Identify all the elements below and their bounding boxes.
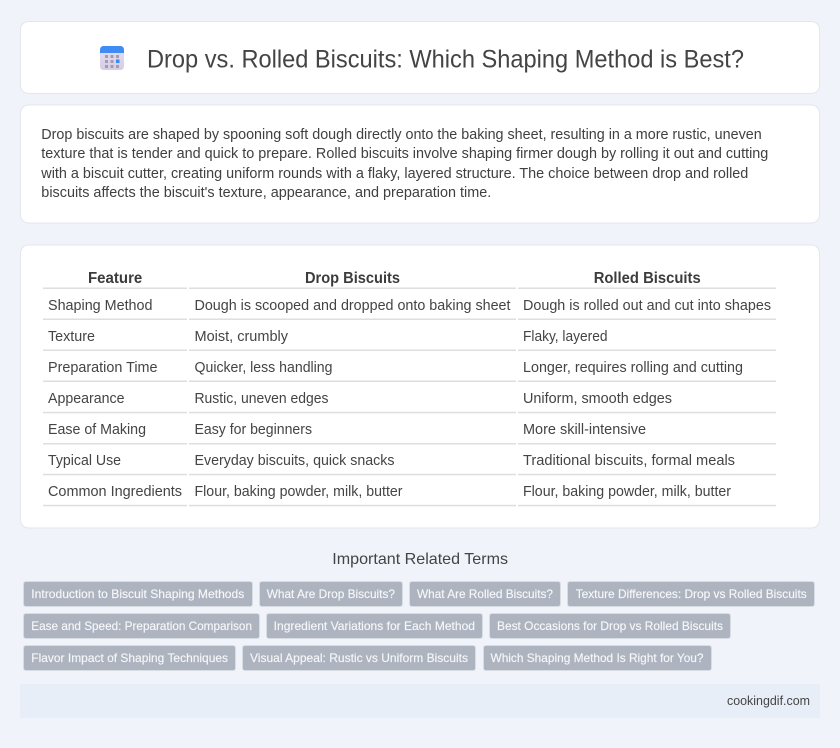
- row: shaping method: Dough is rolled out and cut into shapes: [523, 298, 771, 314]
- panel: comparison table: [20, 245, 820, 528]
- row: shaping method: Shaping Method: [48, 298, 152, 314]
- tag: Flavor Impact of Shaping Techniques: [31, 651, 228, 665]
- row: preparation time: Preparation Time: [48, 360, 158, 376]
- row: appearance: Uniform, smooth edges: [523, 391, 672, 407]
- tag: Visual Appeal: Rustic vs Uniform Biscuits: [250, 651, 468, 665]
- row: texture: Texture: [48, 329, 95, 345]
- row: common ingredients: [43, 484, 776, 506]
- row: appearance: Appearance: [48, 391, 124, 407]
- row: shaping method: [43, 298, 776, 320]
- row: shaping method: Dough is scooped and dropped onto baking sheet: [194, 298, 510, 314]
- tag: [490, 614, 730, 638]
- tag: [24, 614, 260, 638]
- tag: Introduction to Biscuit Shaping Methods: [31, 587, 244, 601]
- tag: Texture Differences: Drop vs Rolled Biscuits: [576, 587, 807, 601]
- row: typical use: [43, 453, 776, 475]
- tag: Ease and Speed: Preparation Comparison: [31, 619, 252, 633]
- row: ease of making: [43, 422, 776, 444]
- tag: [24, 646, 236, 670]
- tag: [24, 582, 252, 606]
- tag: [410, 582, 560, 606]
- row: texture: [43, 329, 776, 351]
- row: ease of making: Easy for beginners: [194, 422, 312, 438]
- title: Drop vs. Rolled Biscuits: Which Shaping Method is Best?: [147, 46, 744, 74]
- intro text: [40, 127, 768, 201]
- tag: [266, 614, 482, 638]
- tag: What Are Drop Biscuits?: [267, 587, 395, 601]
- heading: related terms: Important Related Terms: [332, 551, 508, 568]
- tag: What Are Rolled Biscuits?: [417, 587, 553, 601]
- panel: introduction: [20, 105, 820, 223]
- row: preparation time: Quicker, less handling: [194, 360, 332, 376]
- tag: Best Occasions for Drop vs Rolled Biscuits: [497, 619, 723, 633]
- intro text: Drop biscuits are shaped by spooning soft dough directly onto the baking sheet, resulting in a more rustic, uneven: [41, 127, 762, 143]
- tag: [260, 582, 402, 606]
- row: appearance: [43, 391, 776, 413]
- row: common ingredients: Common Ingredients: [48, 484, 182, 500]
- related term tags: [24, 582, 814, 670]
- table header: [43, 270, 776, 289]
- row: preparation time: [43, 360, 776, 382]
- tag: Which Shaping Method Is Right for You?: [490, 651, 704, 665]
- row: appearance: Rustic, uneven edges: [194, 391, 328, 407]
- table header: Feature: [88, 270, 143, 287]
- table header: Drop Biscuits: [305, 270, 400, 287]
- row: preparation time: Longer, requires rolling and cutting: [523, 360, 743, 376]
- row: typical use: Everyday biscuits, quick snacks: [194, 453, 394, 469]
- intro text: with a biscuit cutter, creating uniform rounds with a flaky, layered structure. The choice between drop and rolled: [40, 166, 748, 182]
- footer source: cookingdif.com: [727, 693, 810, 708]
- tag: [484, 646, 712, 670]
- tag: Ingredient Variations for Each Method: [274, 619, 475, 633]
- row: ease of making: More skill-intensive: [523, 422, 646, 438]
- intro text: biscuits affects the biscuit's texture, appearance, and preparation time.: [41, 185, 491, 201]
- intro text: texture that is tender and quick to prepare. Rolled biscuits involve shaping firmer dough by rolling it out and cutting: [41, 146, 768, 162]
- row: ease of making: Ease of Making: [48, 422, 146, 438]
- footer: [20, 684, 820, 718]
- row: typical use: Traditional biscuits, formal meals: [523, 453, 735, 469]
- tag: [568, 582, 814, 606]
- row: texture: Moist, crumbly: [194, 329, 289, 345]
- row: texture: Flaky, layered: [523, 329, 608, 345]
- table header: Rolled Biscuits: [594, 270, 701, 287]
- panel: header: [20, 22, 820, 94]
- row: common ingredients: Flour, baking powder, milk, butter: [523, 484, 731, 500]
- tag: [242, 646, 476, 670]
- row: typical use: Typical Use: [48, 453, 121, 469]
- icon: calendar: [100, 46, 124, 70]
- row: common ingredients: Flour, baking powder, milk, butter: [194, 484, 403, 500]
